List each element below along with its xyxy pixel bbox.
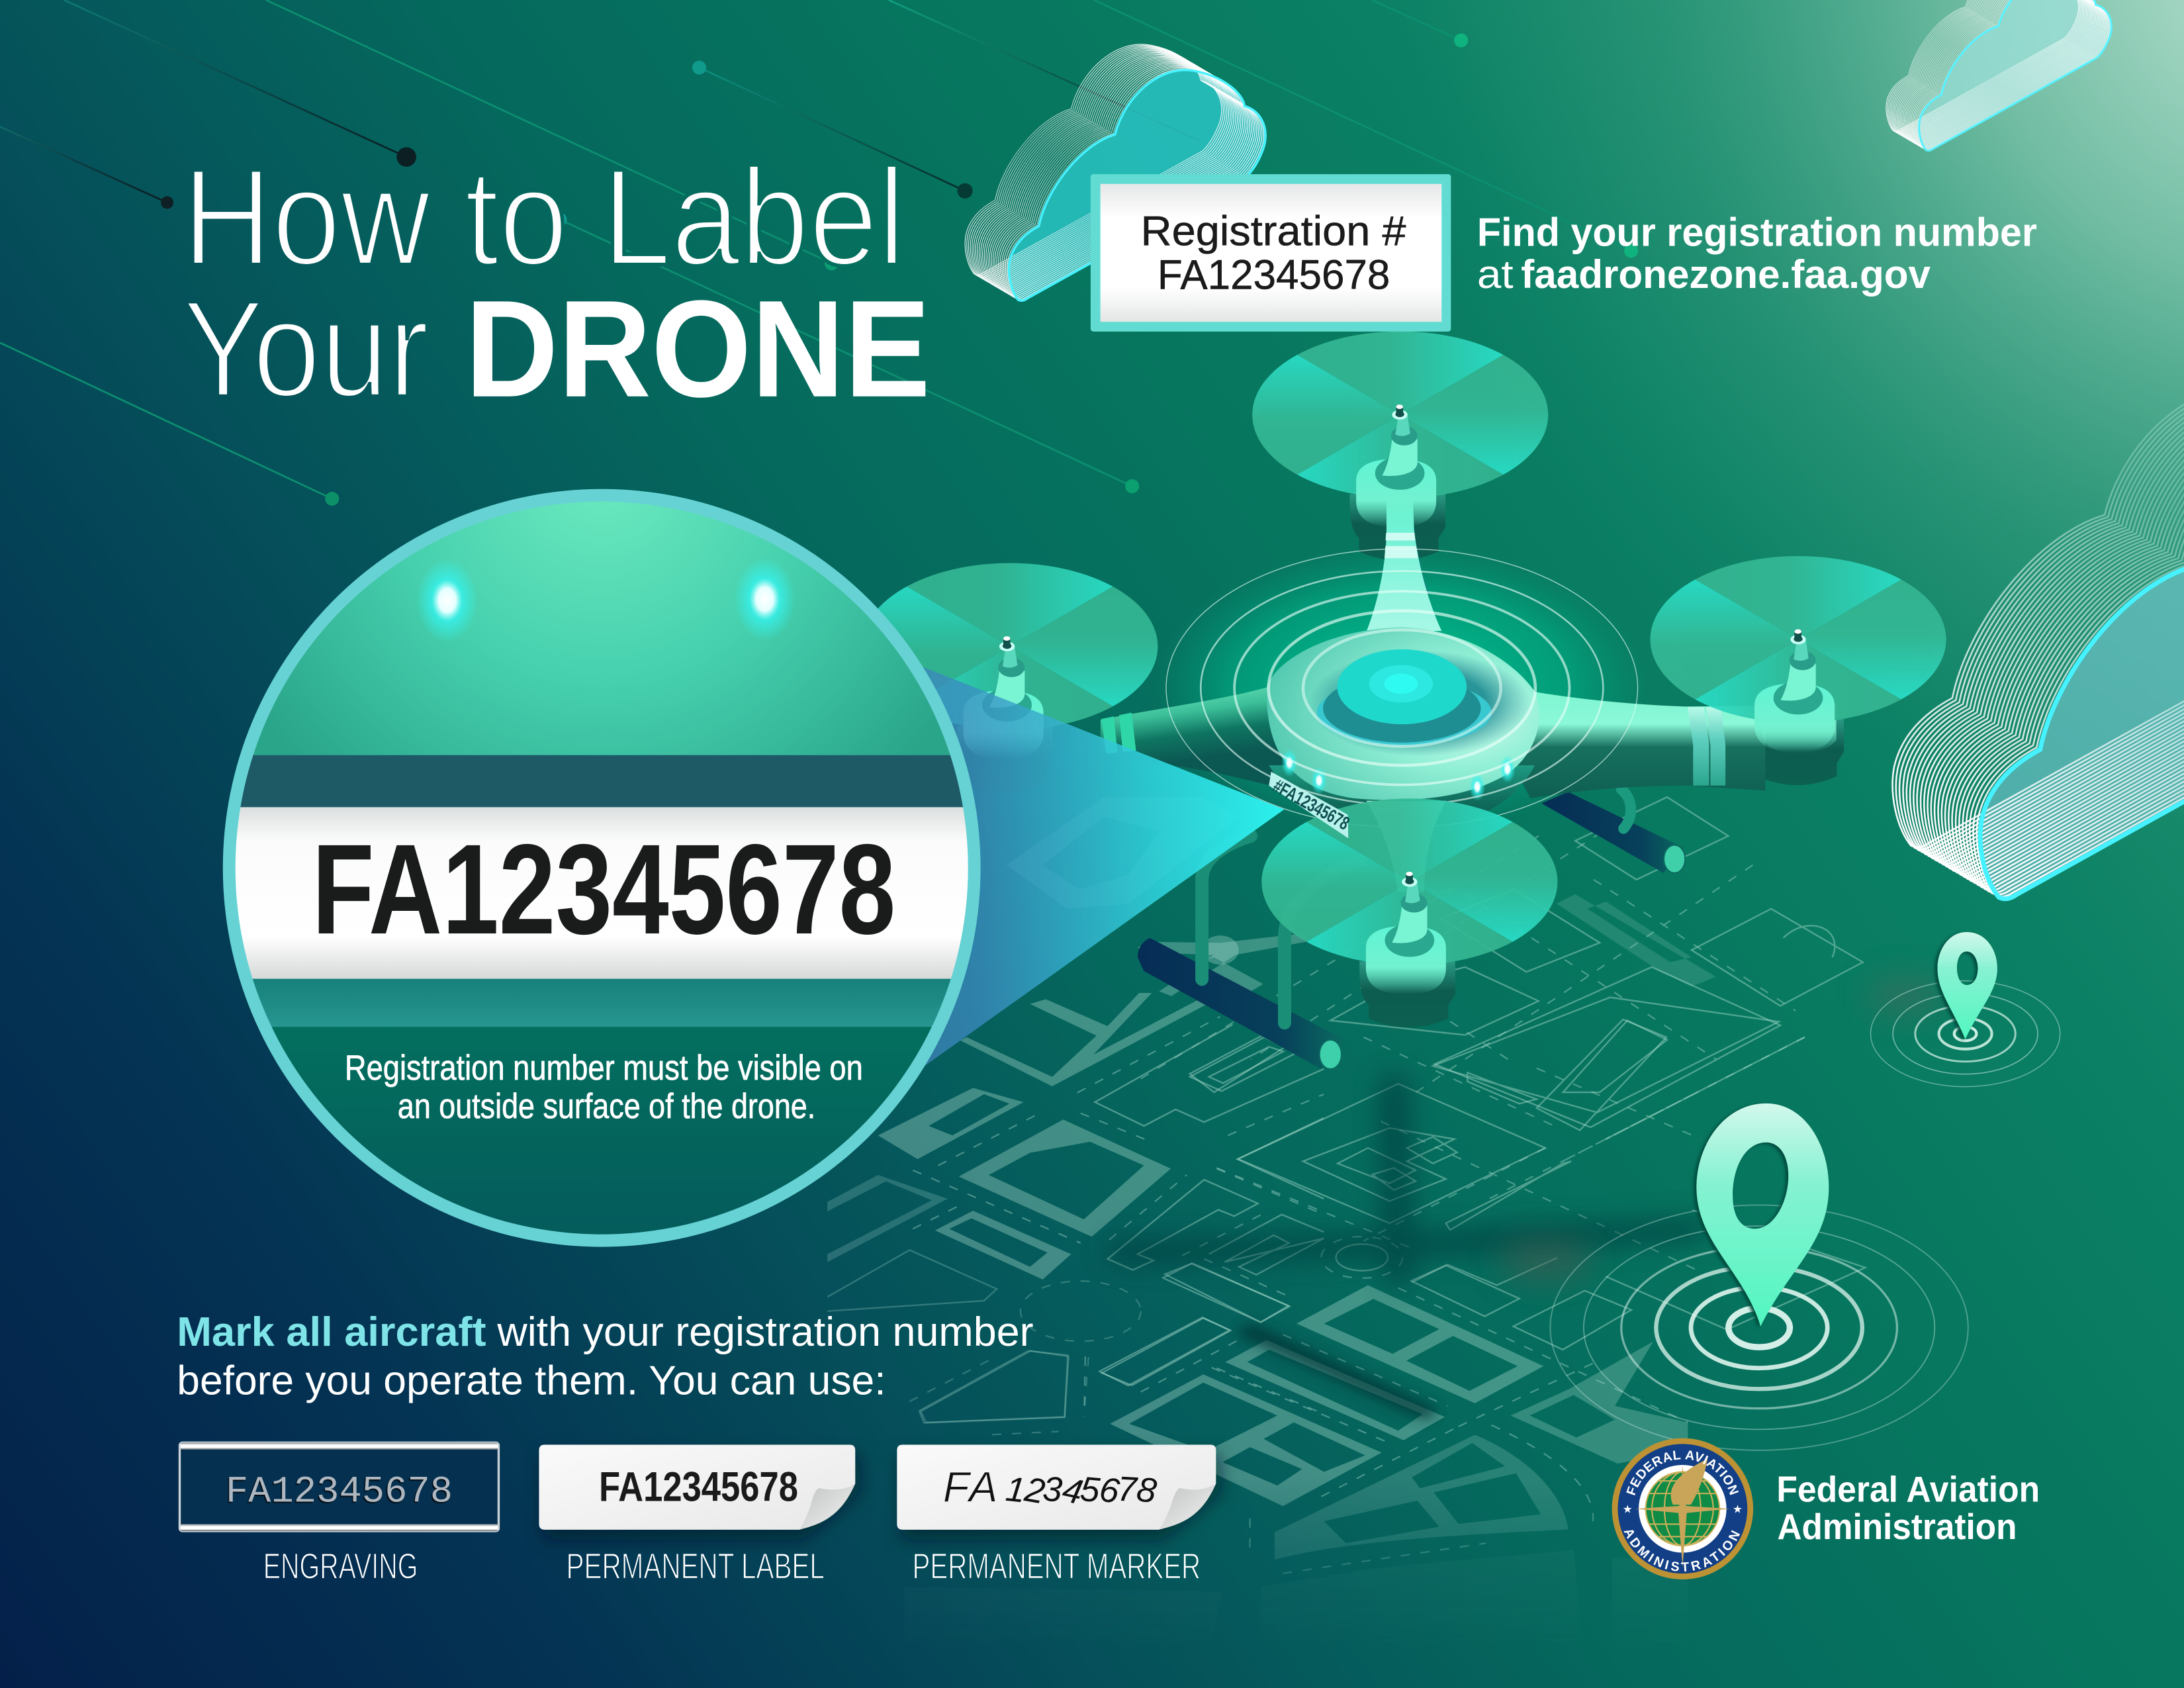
front arm (1367, 801, 1446, 892)
registration label box (1091, 174, 1451, 332)
rotor: right (1650, 556, 1946, 723)
ripple rings (1166, 549, 1638, 827)
seal lettering: FEDERAL AVIATION (1626, 1450, 1739, 1495)
label: engraving: ENGRAVING (263, 1545, 418, 1586)
mark all aircraft instructions: with your registration number (496, 1309, 1034, 1355)
find registration text: faadronezone.faa.gov (1521, 252, 1931, 297)
registration label box: Registration # (1141, 208, 1406, 254)
circle interior bands (223, 494, 981, 1250)
cloud: right edge (1893, 386, 2184, 899)
right arm (1513, 692, 1837, 798)
map: central blocks (1216, 998, 1865, 1330)
map: south blocks (920, 1257, 1688, 1574)
rotor: back (1252, 332, 1548, 498)
circle caption: an outside surface of the drone. (398, 1087, 815, 1126)
find registration text (1477, 211, 2037, 297)
circle caption (345, 1049, 863, 1126)
left arm (1101, 687, 1291, 790)
agency name: Administration (1777, 1506, 2017, 1547)
hub LED lights (1281, 749, 1516, 801)
globe meridians (1646, 1472, 1719, 1546)
propeller spindle: back (1356, 404, 1436, 528)
large registration number: FA12345678 (312, 818, 895, 961)
drone skid shadow on map (1251, 1332, 1424, 1411)
find registration text: Find your registration number (1477, 211, 2037, 255)
title (183, 140, 931, 426)
back arm (1367, 498, 1441, 631)
card: engraving (179, 1442, 498, 1531)
motor body: back (1349, 494, 1445, 561)
mark all aircraft instructions: Mark all aircraft (177, 1309, 486, 1355)
propeller spindle: front (1366, 872, 1446, 994)
mark all aircraft instructions: before you operate them. You can use: (177, 1358, 886, 1404)
seal lettering: ★ (1623, 1503, 1633, 1516)
propeller spindle: left (964, 636, 1044, 759)
map pin small with rings (1870, 932, 2060, 1087)
magnified circle (223, 489, 981, 1250)
rotor: front (1261, 798, 1557, 965)
magnifier light beam (696, 643, 1284, 1080)
cloud: centre top (965, 44, 1265, 301)
rotor: left (862, 563, 1158, 729)
map: west blocks (827, 993, 1324, 1434)
diagonal flight lines with dots (0, 0, 1638, 506)
motor body: left (957, 726, 1053, 792)
propeller spindle: right (1754, 630, 1835, 752)
drone registration sticker (1269, 772, 1353, 838)
seal lettering: ★ (1733, 1503, 1743, 1516)
card: permanent marker: 12345678 (1004, 1470, 1159, 1512)
card: permanent marker (897, 1444, 1216, 1530)
motor body: front (1359, 961, 1455, 1027)
seal lettering: ADMINISTRATION (1624, 1530, 1740, 1571)
title: How to Label (183, 140, 905, 295)
city map (827, 797, 1865, 1642)
agency name (1776, 1469, 2040, 1547)
label: permanent label: PERMANENT LABEL (567, 1545, 825, 1586)
registration label box: FA12345678 (1158, 252, 1390, 299)
title: DRONE (465, 272, 931, 426)
drone (862, 332, 1946, 1069)
card: permanent label: FA12345678 (599, 1464, 798, 1510)
landing skids (1138, 836, 1361, 1069)
drone body shadow on map (1130, 1082, 1684, 1276)
pin ground shadow smudges (1499, 976, 1944, 1280)
hub body (1267, 628, 1539, 829)
find registration text: at (1477, 252, 1514, 297)
title: Your (183, 272, 429, 426)
cloud: top right (1886, 0, 2111, 151)
drone registration sticker: #FA12345678 (1269, 775, 1353, 835)
map: blocks beneath the drone (1138, 796, 1865, 1128)
card: engraving: FA12345678 (226, 1472, 453, 1514)
card: permanent label (539, 1444, 855, 1530)
seal lettering (1623, 1450, 1743, 1571)
glowing lights in circle (416, 557, 796, 642)
back landing skid (1541, 789, 1685, 873)
motor body: right (1748, 719, 1844, 785)
card: permanent marker: FA (943, 1463, 1001, 1511)
label: permanent marker: PERMANENT MARKER (913, 1545, 1201, 1586)
mark all aircraft instructions (177, 1309, 1034, 1404)
map pin large with rings (1550, 1103, 1968, 1450)
agency name: Federal Aviation (1776, 1469, 2040, 1510)
wing and compass star (1635, 1459, 1730, 1568)
circle caption: Registration number must be visible on (345, 1049, 863, 1088)
FAA seal (1612, 1438, 1754, 1579)
